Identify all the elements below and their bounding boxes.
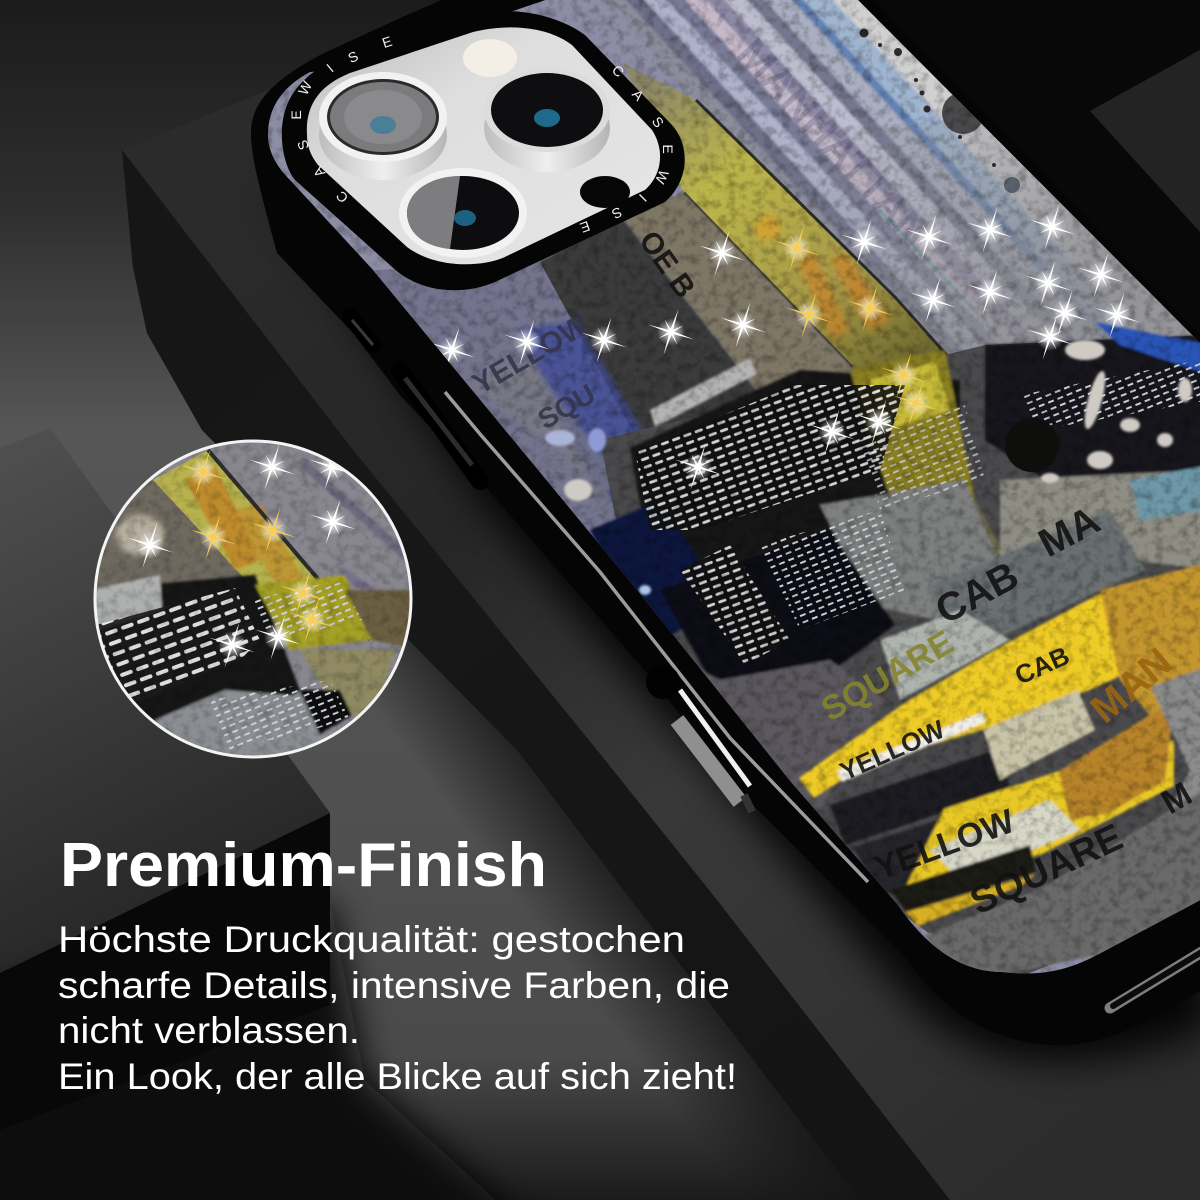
magnified right streaks xyxy=(300,460,410,620)
CASEWISE branding: E xyxy=(288,110,304,120)
sky haze towards skyline xyxy=(816,122,1193,354)
artwork lettering: SQU xyxy=(532,378,601,435)
CASEWISE branding: S xyxy=(294,138,312,152)
soft shade beside block xyxy=(328,630,860,1200)
sky base xyxy=(250,0,1200,990)
lens top left xyxy=(319,72,447,180)
CASEWISE branding: W xyxy=(295,78,315,98)
CASEWISE branding: I xyxy=(323,61,337,75)
volume button xyxy=(400,370,480,481)
CASEWISE branding xyxy=(288,33,676,236)
CASEWISE branding: E xyxy=(660,144,676,154)
CASEWISE branding: C xyxy=(333,188,351,206)
yellow taxi xyxy=(799,562,1200,975)
lens top right xyxy=(484,68,610,172)
step front face xyxy=(0,813,330,1130)
magnified texture xyxy=(90,440,420,760)
blue paint band xyxy=(519,318,645,502)
CASEWISE branding: A xyxy=(629,86,648,104)
camera glass xyxy=(307,27,660,264)
artwork lettering: OE B xyxy=(632,225,701,304)
description text: nicht verblassen. xyxy=(58,1010,360,1051)
magnified sky xyxy=(90,440,420,760)
camera ring xyxy=(282,11,685,290)
taxi amber shade xyxy=(1100,562,1200,715)
magnified yellow band xyxy=(153,450,358,625)
magnified skyline xyxy=(90,575,420,760)
artwork lettering: MAN xyxy=(1083,640,1181,732)
white splashes xyxy=(545,340,1192,595)
magnified white sparkles xyxy=(120,437,363,675)
taxi lower bumper xyxy=(853,820,938,894)
CASEWISE branding: I xyxy=(636,191,650,205)
amber lower xyxy=(1059,700,1174,820)
charging port xyxy=(1110,950,1200,1008)
dark strip xyxy=(890,845,1036,912)
phone case xyxy=(250,0,1200,1045)
dark backdrop upper right xyxy=(500,0,1200,400)
printed artwork xyxy=(250,0,1200,990)
soft step shadow xyxy=(0,900,540,1200)
zoom detail circle xyxy=(90,437,420,760)
yellow paint band xyxy=(623,63,942,371)
magnified pale splash xyxy=(116,515,164,555)
taxi headlight panel xyxy=(983,690,1095,780)
magnified divider xyxy=(208,450,370,640)
charcoal column xyxy=(540,215,760,445)
bottom grey wash xyxy=(925,786,1200,975)
taxi hood xyxy=(798,592,1121,799)
background floor xyxy=(0,0,860,1200)
artwork lettering: YELLOW xyxy=(467,308,595,401)
phone shadow xyxy=(270,190,1200,1062)
taxi white stripe xyxy=(837,712,985,782)
artwork lettering: YELLOW xyxy=(835,714,949,786)
taxi grille xyxy=(830,748,1010,845)
silence switch xyxy=(350,316,373,345)
CASEWISE branding: S xyxy=(649,114,667,130)
step top face xyxy=(0,428,330,973)
CASEWISE branding: S xyxy=(345,48,361,66)
magnified golden sparkles xyxy=(173,442,342,650)
grey wash xyxy=(480,368,610,494)
artwork lettering: SQUARE xyxy=(964,816,1129,923)
description text: Ein Look, der alle Blicke auf sich zieht! xyxy=(58,1056,737,1097)
CASEWISE branding: S xyxy=(609,204,625,222)
yellow bottom strip xyxy=(906,874,1036,926)
camera module xyxy=(282,11,685,290)
CASEWISE branding: A xyxy=(309,163,328,180)
tan column xyxy=(624,192,853,390)
building windows xyxy=(635,385,905,530)
magnified tan column xyxy=(90,480,252,600)
magnified orange strokes xyxy=(185,465,310,590)
golden sparkles xyxy=(774,226,938,426)
lower left step xyxy=(0,428,540,1200)
white bumper xyxy=(930,800,1080,880)
CASEWISE branding: W xyxy=(652,168,672,187)
CASEWISE branding: C xyxy=(609,62,627,80)
artwork lettering: MA xyxy=(1032,498,1107,566)
CASEWISE branding: E xyxy=(578,218,592,236)
lower artwork underlay xyxy=(600,335,1200,985)
skyline blocks xyxy=(590,322,1200,810)
taxi lower yellow xyxy=(906,740,1174,886)
magnified windows xyxy=(96,588,260,705)
white sparkles xyxy=(422,197,1147,497)
artwork lettering: YELLOW xyxy=(870,802,1020,888)
orange strokes xyxy=(755,215,890,340)
CASEWISE branding: E xyxy=(380,33,394,51)
microphone hole xyxy=(580,176,630,208)
case body xyxy=(251,0,1200,1045)
artwork lettering: CAB xyxy=(929,553,1026,633)
artwork lettering: M xyxy=(1155,775,1199,822)
sky streaks xyxy=(608,0,1187,350)
description text: scharfe Details, intensive Farben, die xyxy=(58,965,730,1006)
lens bottom xyxy=(399,168,527,258)
ink splatter xyxy=(860,28,1020,193)
artwork lettering: SQUARE xyxy=(815,623,960,729)
block side face xyxy=(122,150,950,1200)
artwork lettering: CAB xyxy=(1010,640,1074,690)
grey cloud xyxy=(1150,666,1200,809)
band dividers xyxy=(684,100,960,370)
faded sky lettering: MANHATTAN xyxy=(728,30,939,256)
power button xyxy=(646,665,752,812)
flash xyxy=(463,39,517,77)
paint texture xyxy=(250,0,1200,990)
artwork lettering xyxy=(467,225,1199,923)
front edge highlight xyxy=(445,392,868,882)
lavender lower band xyxy=(373,262,660,620)
dark blob xyxy=(1005,418,1059,472)
description text xyxy=(58,919,737,1097)
ring overlay covering hole xyxy=(505,190,665,275)
title: Premium-Finish xyxy=(60,831,547,900)
description text: Höchste Druckqualität: gestochen xyxy=(58,919,685,960)
